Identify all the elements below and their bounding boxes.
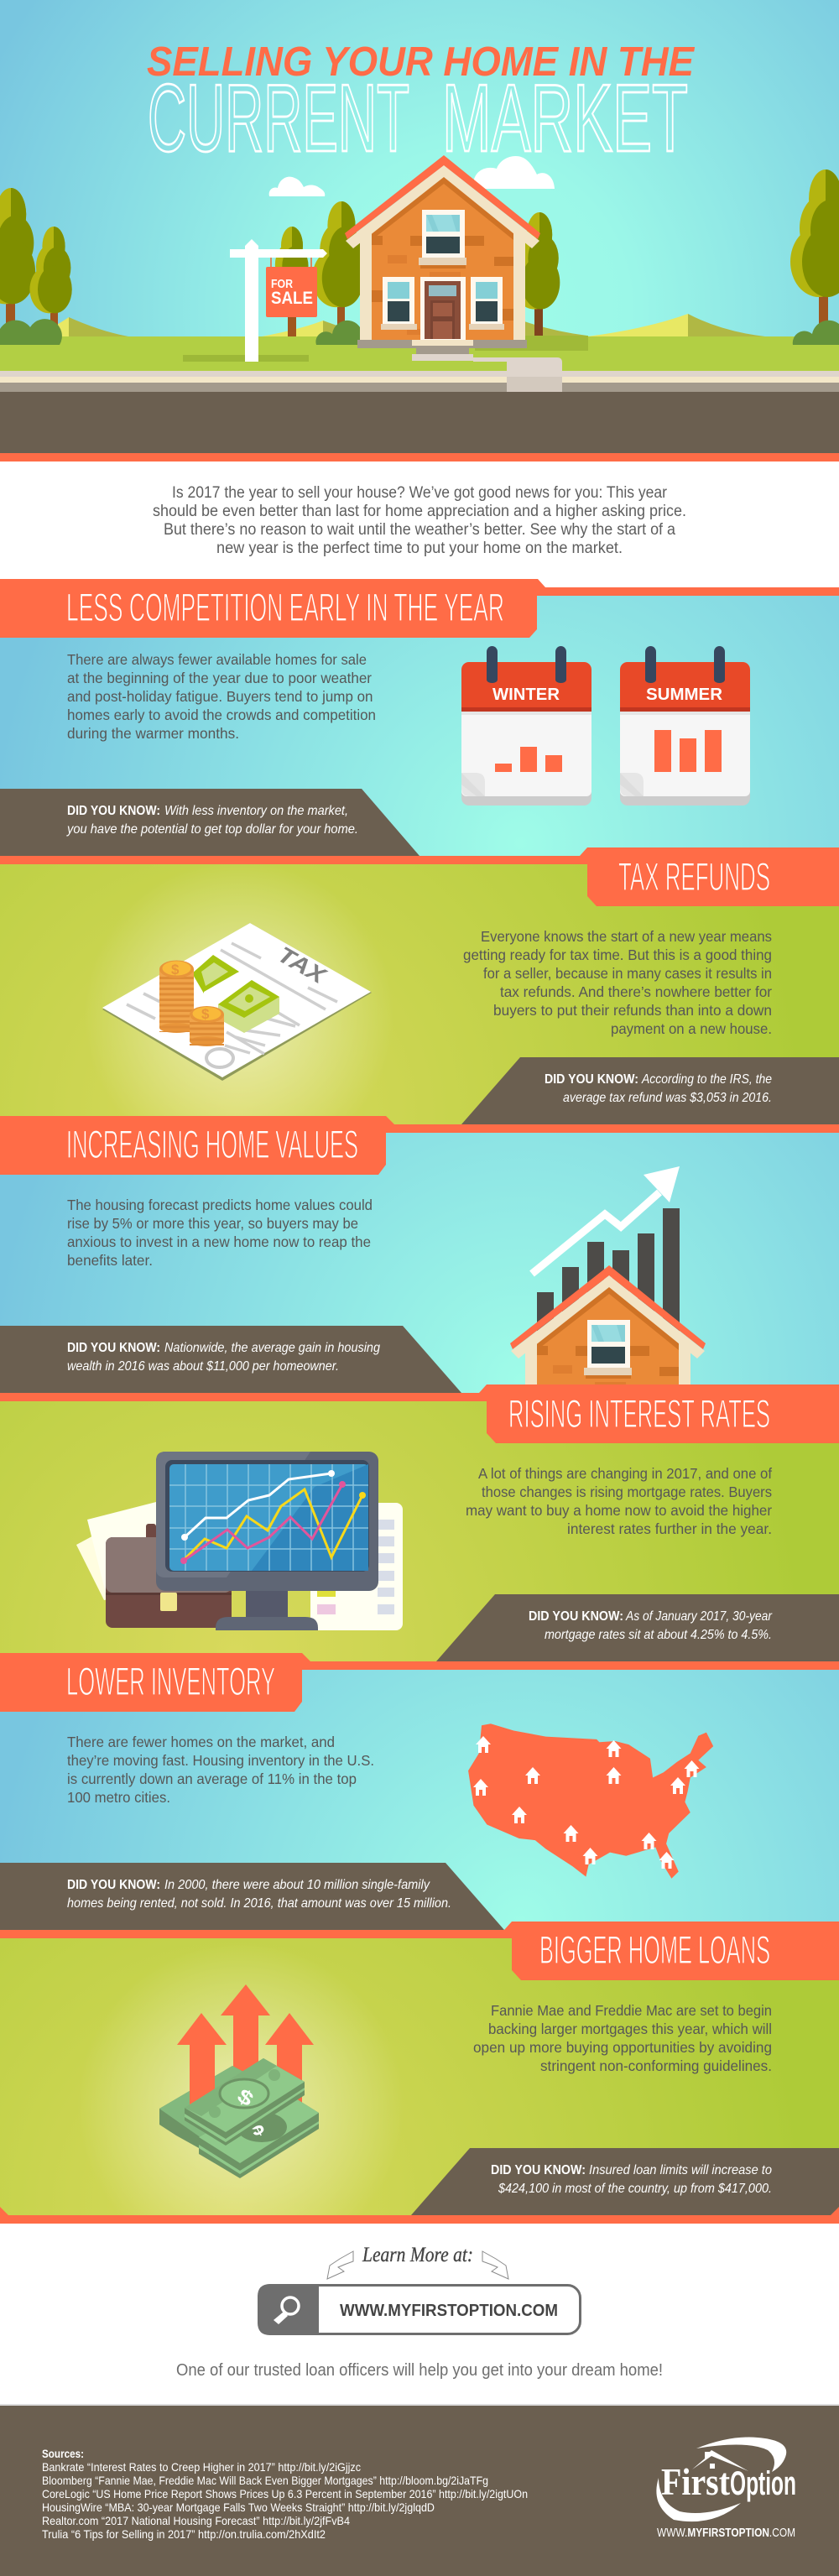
body text — [473, 2002, 772, 2074]
heading tab — [0, 579, 545, 638]
title: selling your home in the: SELLING YOUR HOME IN THE — [147, 39, 695, 85]
hills — [32, 314, 765, 336]
logo: first option: Option — [730, 2465, 796, 2502]
panel: hero scene — [0, 0, 839, 453]
sources list: Bankrate “Interest Rates to Creep Higher in 2017” http://bit.ly/2iGjjzc — [42, 2460, 361, 2474]
did you know callout — [0, 1863, 504, 1930]
clouds — [269, 156, 555, 196]
search bar: WWW.MYFIRSTOPTION.COM — [340, 2302, 558, 2320]
map: united states with home markers — [468, 1723, 713, 1879]
did you know callout: DID YOU KNOW: — [545, 1072, 638, 1087]
body text: payment on a new house. — [611, 1020, 772, 1037]
icon: money stacks with rising arrows: $ — [245, 2114, 268, 2141]
logo: first option: First — [661, 2460, 731, 2503]
sources list: Realtor.com “2017 National Housing Forecast” http://bit.ly/2jfFvB4 — [42, 2514, 350, 2527]
did you know callout — [461, 1057, 839, 1124]
intro text: should be even better than last for home appreciation and a higher asking price. — [153, 503, 686, 520]
title: current market: MARKET — [442, 65, 688, 172]
trees left and behind house — [0, 169, 839, 344]
heading tab — [0, 1653, 310, 1712]
did you know callout: DID YOU KNOW: — [67, 1878, 160, 1892]
did you know callout: Insured loan limits will increase to — [589, 2163, 772, 2177]
icon: tax document with money and coins — [84, 860, 394, 1171]
panel: bigger home loans — [0, 1922, 839, 2270]
body text — [67, 1197, 373, 1269]
body text: at the beginning of the year due to poor weather — [67, 670, 372, 686]
icon: money stacks with rising arrows: $ — [233, 2084, 258, 2110]
did you know callout: As of January 2017, 30-year — [625, 1609, 773, 1624]
title: current market: CURRENT — [148, 65, 409, 172]
body text: There are fewer homes on the market, and — [67, 1734, 335, 1750]
intro text: But there’s no reason to wait until the weather’s better. See why the start of a — [164, 521, 675, 539]
sources list — [42, 2447, 528, 2541]
did you know callout — [0, 1326, 461, 1393]
body text: Fannie Mae and Freddie Mac are set to begin — [491, 2002, 772, 2019]
for sale sign: SALE — [271, 289, 313, 308]
heading tab: LOWER INVENTORY — [66, 1659, 275, 1703]
body text: tax refunds. And there’s nowhere better for — [500, 983, 772, 1000]
did you know callout: According to the IRS, the — [641, 1072, 772, 1087]
body text — [67, 1734, 374, 1806]
sources list: Sources: — [42, 2447, 84, 2460]
arrow: right pointing to search bar — [482, 2251, 508, 2279]
footer — [0, 2404, 839, 2576]
body text: is currently down an average of 11% in the top — [67, 1770, 357, 1787]
icon: magnifier — [274, 2297, 299, 2324]
heading tab: INCREASING HOME VALUES — [66, 1122, 358, 1166]
heading tab: LESS COMPETITION EARLY IN THE YEAR — [66, 585, 504, 629]
intro text — [153, 484, 686, 557]
did you know callout: average tax refund was $3,053 in 2016. — [563, 1091, 772, 1105]
intro text: Is 2017 the year to sell your house? We’ve got good news for you: This year — [172, 484, 668, 502]
panel: lower inventory — [0, 1653, 839, 1938]
icon: tax document with money and coins: $ — [201, 1006, 210, 1022]
heading tab — [580, 847, 839, 906]
calendar: winter — [461, 646, 591, 806]
did you know callout: Nationwide, the average gain in housing — [164, 1341, 380, 1355]
street and curb — [0, 354, 839, 453]
did you know callout — [411, 2148, 839, 2215]
icon: tax document with money and coins: TAX — [274, 941, 331, 989]
did you know callout: DID YOU KNOW: — [67, 804, 160, 818]
icon: money stacks with rising arrows — [77, 1942, 404, 2270]
did you know callout: In 2000, there were about 10 million single-family — [164, 1878, 430, 1892]
body text: for a seller, because in many cases it results in — [483, 965, 772, 982]
sources list: Trulia “6 Tips for Selling in 2017” http://on.trulia.com/2hXdIt2 — [42, 2527, 326, 2541]
icon: house with rising chart — [510, 1166, 706, 1450]
sources list: Bloomberg “Fannie Mae, Freddie Mac Will Back Even Bigger Mortgages” http://bloom.bg/2iJaTFg — [42, 2474, 488, 2487]
panel: rising interest rates — [0, 1384, 839, 1661]
orange divider under panels — [0, 2215, 839, 2224]
did you know callout — [436, 1594, 839, 1661]
heading tab — [479, 1384, 839, 1443]
did you know callout: DID YOU KNOW: — [67, 1341, 160, 1355]
orange divider under hero — [0, 453, 839, 461]
panel: tax refunds — [0, 847, 839, 1171]
panel: less competition — [0, 579, 839, 856]
learn more script heading: Learn More at: — [362, 2244, 473, 2266]
body text: benefits later. — [67, 1252, 153, 1269]
body text: rise by 5% or more this year, so buyers may be — [67, 1215, 358, 1232]
icon: desk with monitor, briefcase and papers — [76, 1452, 403, 1630]
ground — [0, 319, 839, 371]
for sale sign — [230, 239, 327, 362]
icon: tax document with money and coins: $ — [171, 962, 180, 978]
body text: stringent non-conforming guidelines. — [540, 2057, 772, 2074]
did you know callout: DID YOU KNOW: — [491, 2163, 586, 2177]
body text: those changes is rising mortgage rates. Buyers — [482, 1484, 772, 1500]
did you know callout: homes being rented, not sold. In 2016, that amount was over 15 million. — [67, 1896, 451, 1911]
body text: The housing forecast predicts home values could — [67, 1197, 373, 1213]
body text — [463, 928, 772, 1037]
did you know callout: With less inventory on the market, — [164, 804, 348, 818]
body text: may want to buy a home now to avoid the higher — [466, 1502, 772, 1519]
body text: and post-holiday fatigue. Buyers tend to jump on — [67, 688, 373, 705]
body text: open up more buying opportunities by avoiding — [473, 2039, 772, 2056]
body text: anxious to invest in a new home now to reap the — [67, 1233, 371, 1250]
calendar: winter: WINTER — [492, 686, 560, 704]
for sale sign: FOR — [271, 278, 293, 291]
logo: first option: WWW.MYFIRSTOPTION.COM — [657, 2526, 795, 2540]
arrow: left pointing to search bar — [327, 2251, 353, 2279]
house — [345, 155, 540, 354]
body text: interest rates further in the year. — [567, 1520, 772, 1537]
did you know callout — [0, 789, 420, 856]
did you know callout: mortgage rates sit at about 4.25% to 4.5%. — [545, 1628, 772, 1642]
body text: A lot of things are changing in 2017, and one of — [478, 1465, 772, 1482]
search bar — [258, 2284, 581, 2335]
panel: increasing home values — [0, 1116, 839, 1450]
logo: first option — [656, 2438, 796, 2540]
body text: backing larger mortgages this year, which will — [488, 2021, 772, 2037]
body text: during the warmer months. — [67, 725, 239, 742]
body text: getting ready for tax time. But this is a good thing — [463, 946, 772, 963]
heading tab — [504, 1922, 839, 1980]
body text: homes early to avoid the crowds and competition — [67, 707, 376, 723]
calendar: summer: SUMMER — [646, 686, 723, 704]
sources list: HousingWire “MBA: 30-year Mortgage Falls Two Weeks Straight” http://bit.ly/2jglqdD — [42, 2500, 435, 2514]
closing line: One of our trusted loan officers will help you get into your dream home! — [176, 2361, 663, 2380]
did you know callout: $424,100 in most of the country, up from $417,000. — [498, 2182, 772, 2196]
intro text: new year is the perfect time to put your home on the market. — [216, 540, 623, 557]
body text: 100 metro cities. — [67, 1789, 170, 1806]
heading tab — [0, 1116, 394, 1175]
did you know callout: wealth in 2016 was about $11,000 per homeowner. — [67, 1359, 339, 1374]
calendar: summer — [620, 646, 750, 806]
did you know callout: DID YOU KNOW: — [529, 1609, 623, 1624]
body text: they’re moving fast. Housing inventory in the U.S. — [67, 1752, 374, 1769]
sources list: CoreLogic “US Home Price Report Shows Prices Up 6.3 Percent in September 2016” http://bit.ly/2igtUOn — [42, 2487, 528, 2500]
did you know callout: you have the potential to get top dollar for your home. — [66, 822, 358, 837]
body text — [67, 651, 376, 742]
body text: There are always fewer available homes for sale — [67, 651, 367, 668]
body text — [466, 1465, 772, 1537]
body text: Everyone knows the start of a new year means — [481, 928, 772, 945]
body text: buyers to put their refunds than into a down — [493, 1002, 772, 1019]
